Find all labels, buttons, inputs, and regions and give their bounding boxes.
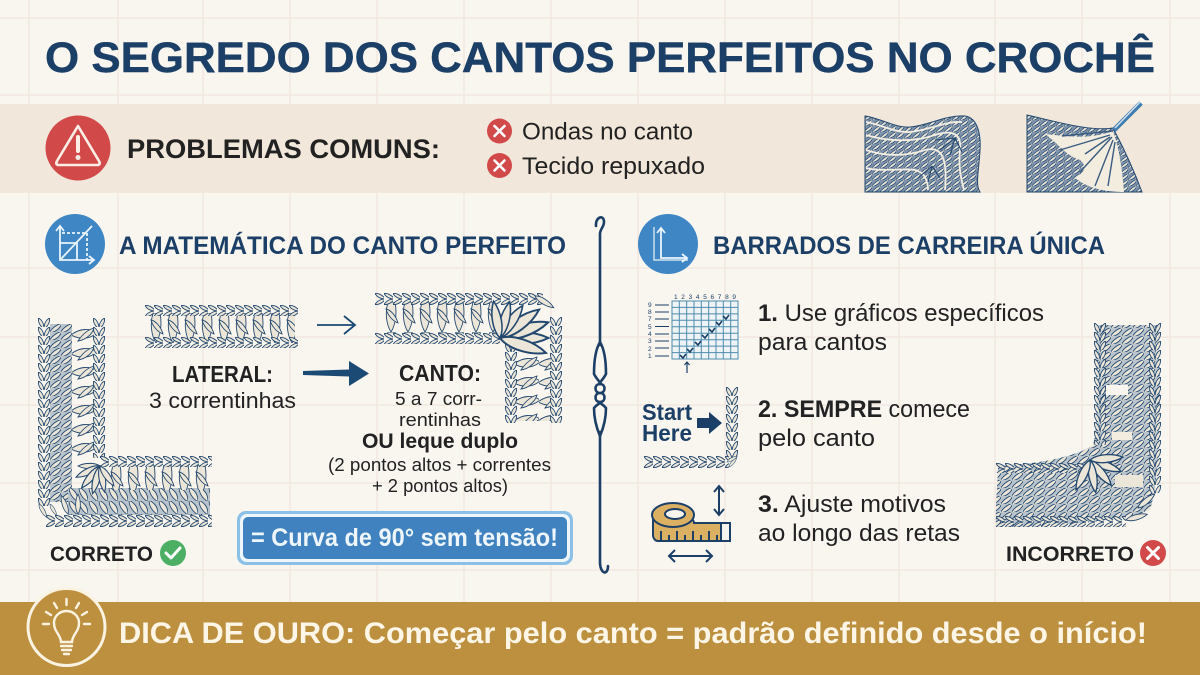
text: canto: CANTO:: [399, 360, 481, 386]
icon: graph blue: [45, 214, 105, 274]
text: canto: (2 pontos altos + correntes: [328, 455, 551, 475]
arrow: thick: [303, 361, 369, 386]
label: correto: [50, 540, 186, 566]
icon: stitch chart: 3: [648, 338, 652, 345]
section: matemática heading: [45, 214, 566, 274]
text: tecido repuxado: Tecido repuxado: [522, 153, 705, 180]
icon: measuring tape: [652, 486, 730, 562]
icon: stitch chart: 5: [648, 324, 652, 331]
heading: barrados: BARRADOS DE CARREIRA ÚNICA: [713, 230, 1105, 260]
illustration: lateral stitch sample: [145, 305, 298, 348]
illustration: wavy crochet corner: [865, 116, 980, 192]
heading: problemas comuns: PROBLEMAS COMUNS:: [127, 134, 440, 164]
callout: curva de 90: [237, 511, 573, 565]
text: dica: DICA DE OURO: Começar pelo canto = padrão definido desde o início!: [119, 617, 1147, 650]
text: canto: OU leque duplo: [362, 430, 518, 453]
text: step 3: ao longo das retas: [758, 520, 960, 547]
label: incorreto: [1006, 540, 1166, 566]
icon: stitch chart: 2: [648, 346, 652, 353]
icon: x ondas: [487, 118, 512, 144]
illustration: puckered crochet corner with needle: [1027, 102, 1142, 192]
text: step 1: para cantos: [758, 329, 887, 356]
icon: stitch chart: 123456789: [674, 294, 736, 301]
icon: stitch chart: 7: [648, 316, 652, 323]
section: barrados heading: [638, 214, 1105, 274]
text: step 3: [758, 491, 960, 547]
text: ondas no canto: Ondas no canto: [522, 118, 693, 146]
illustration: corner stitch sample: [375, 293, 562, 423]
illustration: correct corner swatch: [37, 318, 212, 527]
icon: stitch chart: 8: [648, 309, 652, 316]
icon: green check: [160, 540, 186, 566]
icon: stitch chart: [648, 294, 738, 373]
panel: problemas comuns: [0, 102, 1200, 193]
icon: light bulb: [28, 588, 105, 666]
callout: curva de 90: = Curva de 90° sem tensão!: [251, 524, 558, 552]
illustration: incorrect corner swatch: [996, 323, 1161, 527]
label: correto: CORRETO: [50, 543, 153, 566]
icon: start here: [642, 387, 738, 468]
icon: x tecido: [487, 153, 512, 178]
text: lateral: LATERAL:: [172, 361, 273, 387]
heading: a matemática: A MATEMÁTICA DO CANTO PERFEITO: [119, 231, 566, 260]
title: O SEGREDO DOS CANTOS PERFEITOS NO CROCHÊ: [45, 33, 1155, 82]
text: lateral: [149, 361, 296, 413]
icon: stitch chart: 1: [648, 353, 652, 360]
icon: start here: Start: [642, 399, 692, 425]
text: canto: rentinhas: [399, 410, 481, 430]
icon: stitch chart: 4: [648, 331, 652, 338]
text: step 3: 3. Ajuste motivos: [758, 491, 946, 518]
text: canto: [328, 360, 551, 496]
text: step 2: [758, 396, 970, 452]
text: lateral: 3 correntinhas: [149, 388, 296, 413]
icon: axes blue: [638, 214, 698, 274]
text: canto: 5 a 7 corr-: [395, 389, 482, 409]
text: step 2: pelo canto: [758, 425, 875, 452]
icon: warning: [46, 116, 110, 180]
icon: start here: Here: [642, 420, 692, 446]
text: step 1: 1. Use gráficos específicos: [758, 300, 1044, 327]
footer: dica de ouro: [0, 588, 1200, 675]
text: step 2: 2. SEMPRE comece: [758, 396, 970, 423]
text: step 1: [758, 300, 1044, 356]
text: canto: + 2 pontos altos): [372, 476, 508, 496]
label: incorreto: INCORRETO: [1006, 543, 1134, 566]
icon: red x: [1140, 540, 1166, 566]
arrow: thin: [317, 316, 355, 334]
divider: crochet hook: [594, 217, 608, 572]
icon: stitch chart: 9: [648, 302, 652, 309]
